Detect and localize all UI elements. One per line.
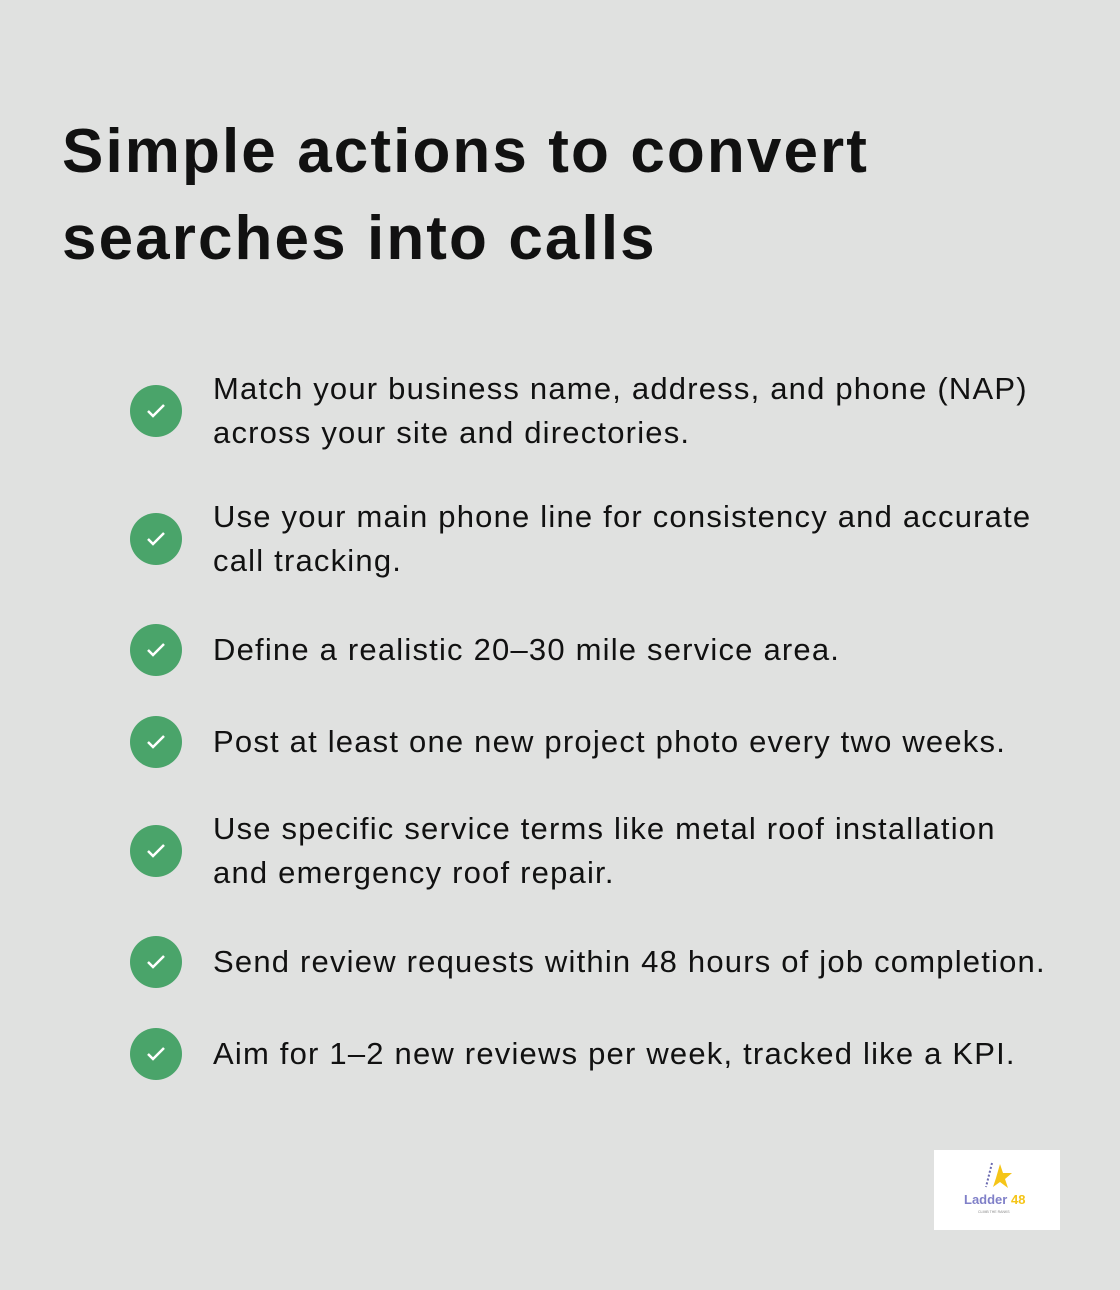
item 5: and emergency roof repair. [213,855,615,890]
item 2: call tracking. [213,543,402,578]
title: Simple actions to convert [62,117,869,186]
item 7 [130,1028,1016,1080]
item 6 [130,936,1046,988]
logo [934,1150,1060,1230]
item 4 [130,716,1006,768]
item 3 [130,624,840,676]
item 6: Send review requests within 48 hours of job completion. [213,944,1046,979]
item 1: Match your business name, address, and phone (NAP) [213,371,1028,406]
title [62,117,869,273]
item 1 [130,371,1028,450]
logo: CLIMB THE RANKS [978,1210,1010,1214]
item 1: across your site and directories. [213,415,690,450]
item 7: Aim for 1–2 new reviews per week, tracked like a KPI. [213,1036,1016,1071]
item 3: Define a realistic 20–30 mile service area. [213,632,840,667]
title: searches into calls [62,204,657,273]
logo: Ladder 48 [964,1192,1025,1207]
item 5 [130,811,996,890]
item 2 [130,499,1031,578]
item 2: Use your main phone line for consistency and accurate [213,499,1031,534]
item 5: Use specific service terms like metal roof installation [213,811,996,846]
item 4: Post at least one new project photo every two weeks. [213,724,1006,759]
